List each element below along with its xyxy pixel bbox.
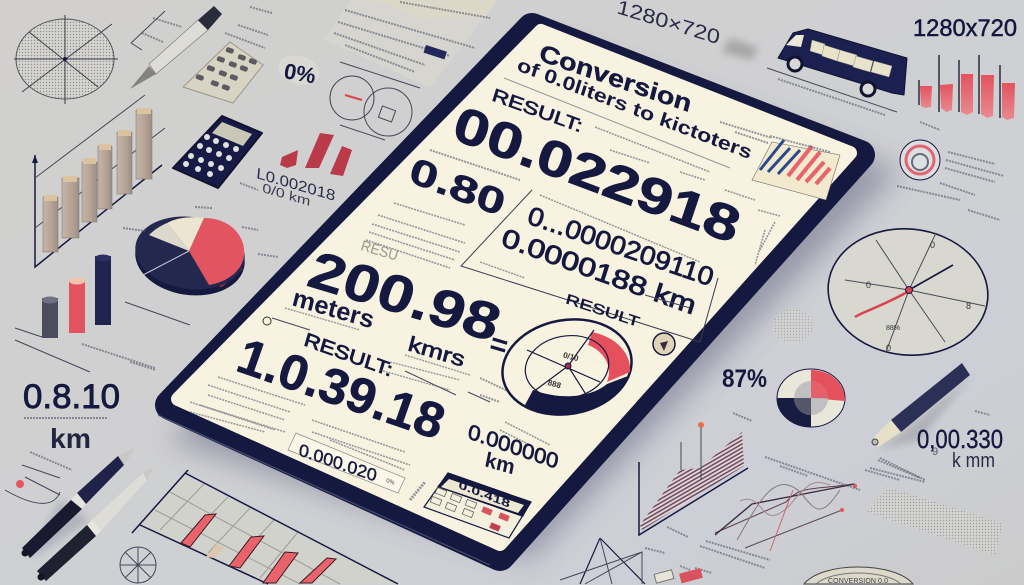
result box: 0...0000209110 [524,202,717,292]
conversion value: 200.98: 200.98 [301,241,508,353]
left value: 0.8.10 km [23,378,120,454]
icon: small wheel [120,547,156,583]
text lines: lower screen [190,295,690,470]
value: 0.000000 km: km [483,448,517,479]
icon: dotted circle diagram [14,15,118,104]
result box [461,190,718,342]
gauge: 0/10 [562,351,580,363]
gauge [495,309,639,425]
bar chart: red bars on grid [132,470,400,584]
title: of 0.0liters to kictoters [514,55,754,164]
value label: 0.002018 km [240,165,336,209]
right value: 0.00.330 km [865,411,1003,482]
mini chart on screen [720,122,840,200]
tablet [158,28,900,565]
icon: concentric ring [897,140,1004,220]
seal bottom [804,567,913,585]
icon: calculator on screen: 0.0.418 [457,479,511,511]
unit: kmrs: kmrs [406,333,467,372]
compass diagram: 88% [886,325,900,332]
unit: meters: meters [289,284,377,334]
title: Conversion [537,40,694,118]
title [514,40,754,164]
sketch: two overlapping circles [330,62,420,140]
small pie chart [777,369,845,427]
blurred smudge [722,38,758,60]
result label 2: RESULT: [302,330,395,381]
secondary value: 0.80: 0.80 [405,150,510,224]
seal bottom: CONVERSION 0.0 [828,578,888,585]
percentage label: 87% [722,365,767,393]
dotted rectangle [867,487,1003,555]
right value: 0.00.330 km: 0,00.330 [917,424,1003,454]
result label 3: RESULT [564,290,642,330]
tablet shadow [170,40,900,560]
compass diagram: 8 [966,301,971,311]
icon: bus [767,29,907,115]
gauge: 888 [547,378,562,390]
boxed value: 0% [386,478,396,487]
area chart: striped wave [639,413,752,537]
main result value: 00.022918 [446,95,747,254]
equals sign: = [486,327,511,364]
value label: 0.002018 km: 0/0 km [262,180,311,209]
dotted ellipse [773,309,813,343]
boxed value: 0.000.020 [297,440,378,486]
line chart: crossing curves [700,457,925,568]
result box: 0.0000188 km [498,224,699,320]
note above left value [15,340,156,372]
right value: 0.00.330 km: k mm [952,450,995,472]
left value: 0.8.10 km: km [50,423,91,454]
faded result label: RESU [359,238,400,264]
tablet body [170,28,860,556]
percent badge: 0% [282,58,318,88]
small badge on screen [653,333,675,355]
icon: pen top [130,6,222,89]
boxed value [288,433,405,493]
text lines: paragraph left [366,203,465,268]
chart: red bars with sticks [919,55,1015,130]
top paper sheet [325,0,497,88]
compass diagram [822,221,994,363]
icon: dark calculator [173,116,262,188]
result value: 1.0.39.18: 1.0.39.18 [230,328,452,450]
icon: marker [872,363,972,450]
result label: RESULT: [490,85,585,136]
pie chart [123,207,278,302]
compass diagram: 0 [886,343,891,353]
cylinders chart [15,254,190,338]
left value: 0.8.10 km: 0.8.10 [23,378,120,416]
right value: 0.00.330 km: 9 [932,446,938,458]
small note top [131,7,272,50]
red 3D bars [280,133,352,176]
icon: calculator on screen [424,473,531,538]
icon: two pens [22,447,154,581]
compass diagram: 0 [866,280,871,290]
percent badge [275,51,323,89]
text lines: upper screen [430,127,780,265]
icon: light calculator [183,42,263,103]
value: 0.000000 km: 0.000000 [466,420,560,474]
network sketch bottom [560,538,712,584]
small sketch lower left [5,452,72,503]
tablet screen [178,31,850,544]
value label: 0.002018 km: L0.002018 [256,165,336,205]
compass diagram: 0 [930,240,935,250]
top right label: 1280x720: 1280x720 [913,15,1017,42]
bar chart: beige 3D bars [32,95,165,267]
